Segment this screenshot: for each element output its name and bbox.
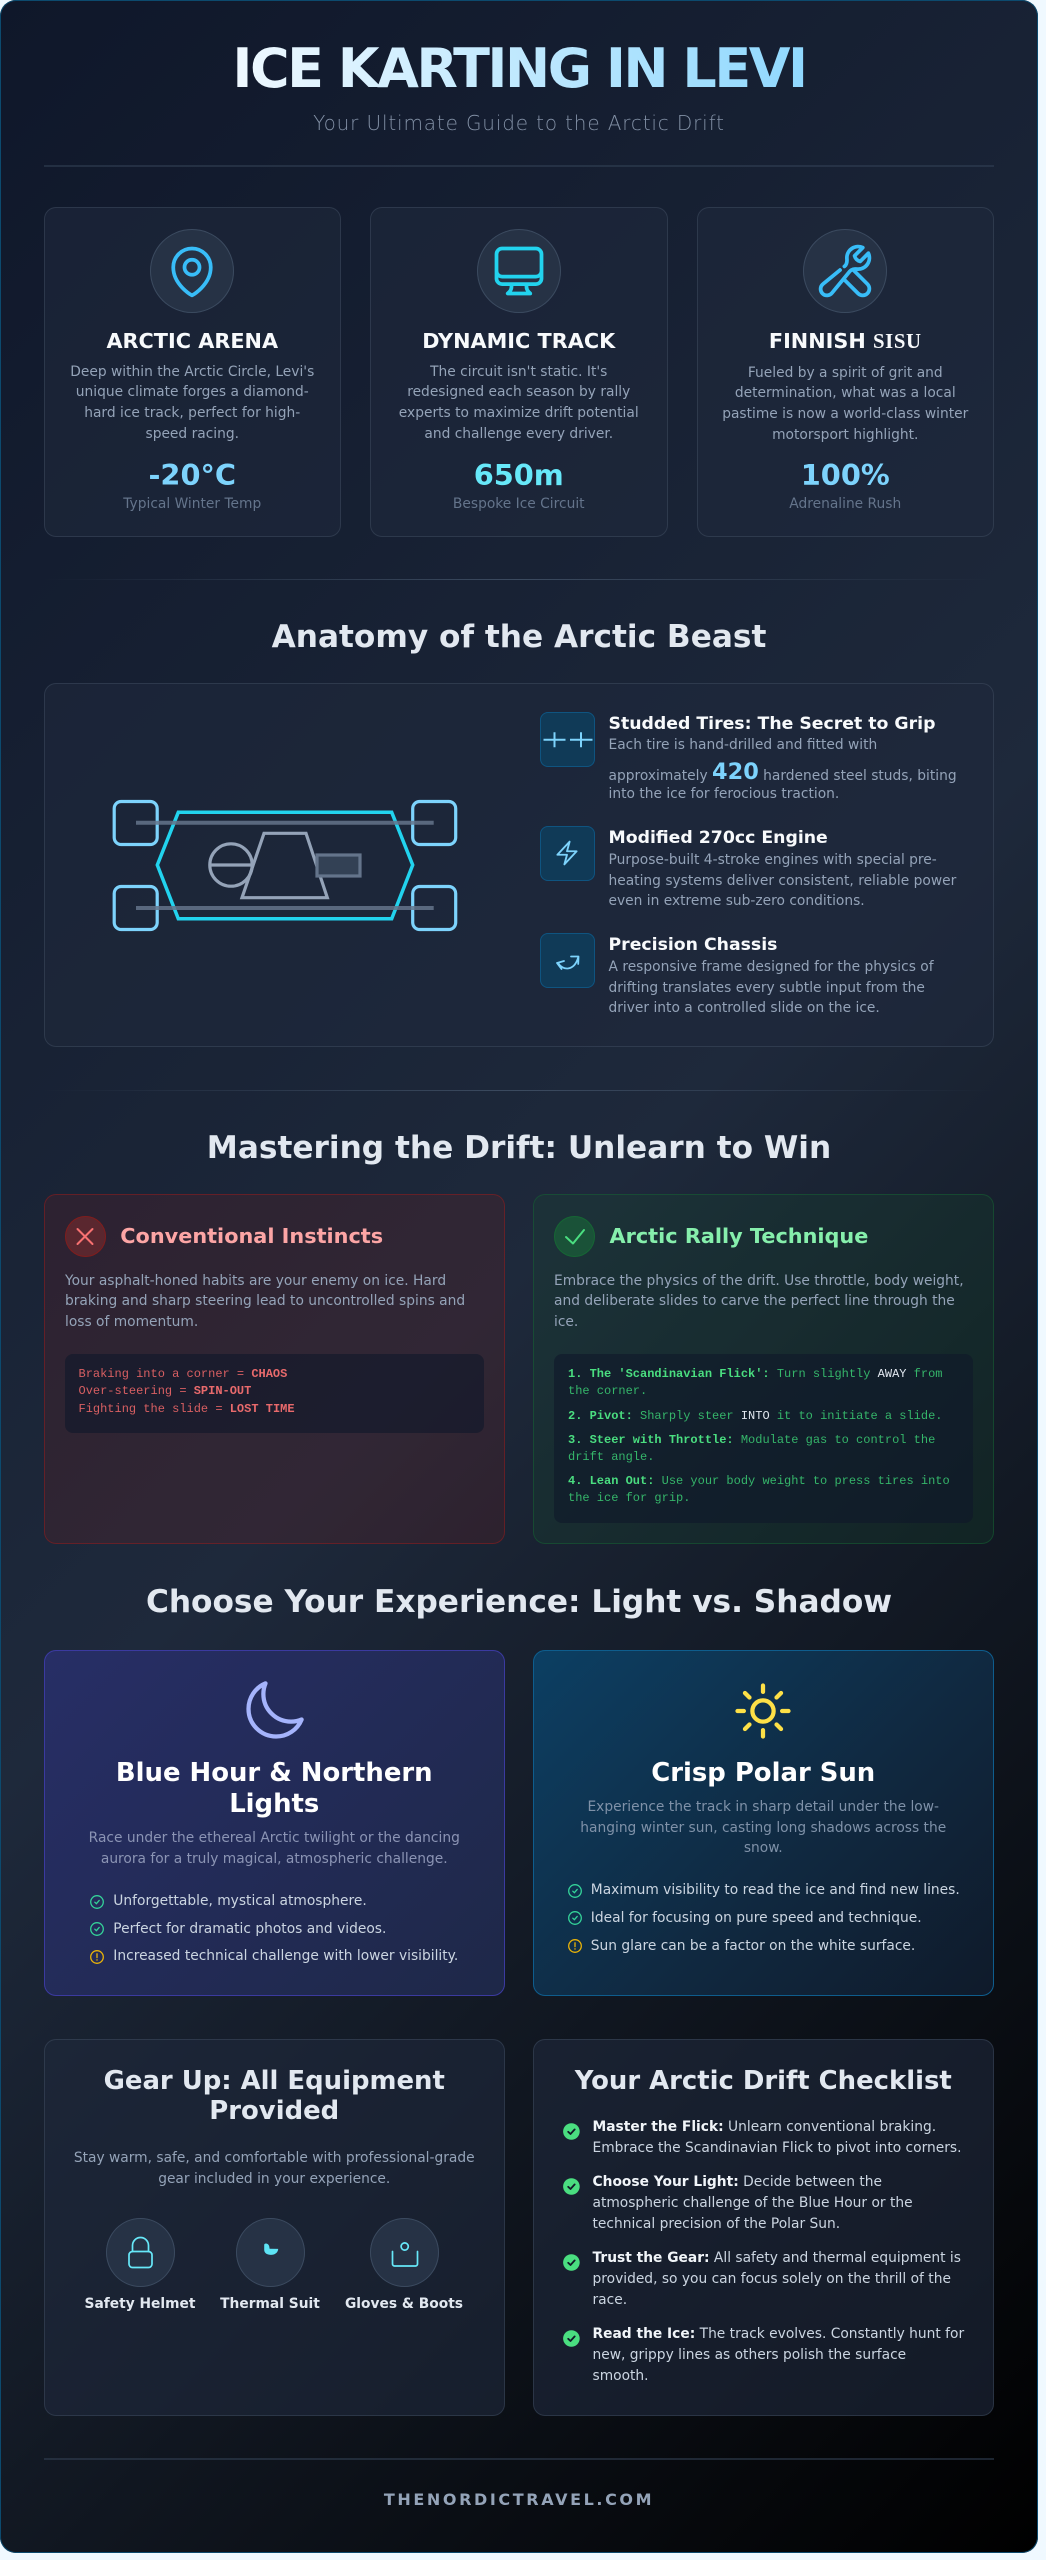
description xyxy=(70,364,314,442)
footer: THENORDICTRAVEL.COM xyxy=(384,2490,654,2509)
feature text: tires: into the ice for ferocious traction. xyxy=(608,786,839,802)
icon: check xyxy=(554,1216,595,1256)
description: pastime is now a world-class winter xyxy=(722,406,968,422)
list: Ideal for focusing on pure speed and technique. xyxy=(591,1910,922,1926)
icon: moon xyxy=(246,1681,304,1739)
checklist item: Read the Ice: The track evolves. Constantly hunt for xyxy=(592,2326,964,2342)
stat: -20°C xyxy=(148,458,236,492)
feature text: chassis xyxy=(608,959,934,1016)
text: loss of momentum. xyxy=(65,1314,198,1330)
heading: Conventional Instincts xyxy=(120,1224,383,1248)
checklist item: Trust the Gear: All safety and thermal equipment is xyxy=(592,2250,961,2266)
panel: anatomy xyxy=(44,683,994,1047)
heading: Lights xyxy=(229,1789,319,1819)
code box: 1. The 'Scandinavian Flick': Turn slightly AWAY from xyxy=(568,1367,942,1381)
text: Embrace the physics of the drift. Use throttle, body weight, xyxy=(554,1272,964,1288)
panel: finnish sisu xyxy=(696,207,994,537)
panel: rally technique xyxy=(532,1194,994,1544)
list: Maximum visibility to read the ice and find new lines. xyxy=(591,1882,960,1898)
text: Race under the ethereal Arctic twilight or the dancing xyxy=(89,1830,460,1846)
panel: blue hour xyxy=(44,1650,505,1996)
label: Gloves & Boots xyxy=(345,2296,463,2312)
text: Stay warm, safe, and comfortable with professional-grade xyxy=(74,2150,475,2166)
feature text: chassis: driver into a controlled slide on the ice. xyxy=(608,1000,880,1016)
stat: 100% xyxy=(801,458,890,492)
list: Sun glare can be a factor on the white surface. xyxy=(591,1938,915,1954)
heading xyxy=(104,2066,445,2126)
code box xyxy=(554,1354,972,1522)
code box: Braking into a corner = CHAOS xyxy=(78,1367,287,1381)
text: hanging winter sun, casting long shadows across the xyxy=(580,1820,946,1836)
checklist item: technical precision of the Polar Sun. xyxy=(592,2216,840,2232)
description xyxy=(722,364,968,443)
code box: 3. Steer with Throttle: Modulate gas to control the xyxy=(568,1432,935,1446)
text: gear included in your experience. xyxy=(158,2171,390,2187)
feature text: chassis: drifting translates every subtle input from the xyxy=(608,980,925,996)
icon: lock xyxy=(106,2218,174,2286)
code box: 4. Lean Out: Use your body weight to press tires into xyxy=(568,1474,950,1488)
stat label: Bespoke Ice Circuit xyxy=(453,496,585,512)
icon: map pin xyxy=(150,229,234,313)
panel: dynamic track xyxy=(370,207,668,537)
description: hard ice track, perfect for high- xyxy=(84,405,300,421)
text: snow. xyxy=(744,1840,783,1856)
checklist item: provided, so you can focus solely on the thrill of the xyxy=(592,2271,951,2287)
icon: gloves xyxy=(370,2218,438,2286)
stat label: Typical Winter Temp xyxy=(123,496,261,512)
text: Your asphalt-honed habits are your enemy on ice. Hard xyxy=(65,1272,446,1288)
panel: checklist xyxy=(532,2039,994,2416)
checklist item: Choose Your Light: Decide between the xyxy=(592,2174,882,2190)
gear: suit xyxy=(220,2218,320,2312)
stat: 650m xyxy=(474,458,564,492)
checklist item: Master the Flick: Unlearn conventional braking. xyxy=(592,2119,936,2135)
code box: drift angle. xyxy=(568,1450,654,1464)
heading: Your Arctic Drift Checklist xyxy=(575,2066,952,2096)
description: Deep within the Arctic Circle, Levi's xyxy=(70,364,314,380)
code box: 2. Pivot: Sharply steer INTO it to initiate a slide. xyxy=(568,1408,942,1422)
text: aurora for a truly magical, atmospheric challenge. xyxy=(101,1851,448,1867)
checklist item: smooth. xyxy=(592,2368,649,2384)
description: unique climate forges a diamond- xyxy=(76,384,309,400)
heading: anatomy: Anatomy of the Arctic Beast xyxy=(272,619,766,655)
description: and challenge every driver. xyxy=(424,426,613,442)
icon: cross xyxy=(65,1216,106,1256)
feature text: tires: approximately 420 hardened steel studs, biting xyxy=(608,758,957,784)
feature text: engine: heating systems deliver consistent, reliable power xyxy=(608,872,956,888)
icon: suit xyxy=(236,2218,304,2286)
text: and deliberate slides to carve the perfect line through the xyxy=(554,1293,955,1309)
code box: the corner. xyxy=(568,1384,647,1398)
heading: Crisp Polar Sun xyxy=(651,1758,875,1788)
text: ice. xyxy=(554,1314,578,1330)
text xyxy=(554,1272,964,1330)
feature text: engine: even in extreme sub-zero conditions. xyxy=(608,893,865,909)
subtitle: Your Ultimate Guide to the Arctic Drift xyxy=(313,110,725,134)
checklist item xyxy=(563,2174,913,2232)
checklist item: Embrace the Scandinavian Flick to pivot into corners. xyxy=(592,2140,962,2156)
stat label: Adrenaline Rush xyxy=(789,496,901,512)
checklist item: new, grippy lines as others polish the surface xyxy=(592,2347,906,2363)
panel: arctic arena xyxy=(44,207,341,537)
heading: FINNISH SISU xyxy=(769,329,922,353)
feature: chassis: Precision Chassis xyxy=(608,935,777,955)
panel: polar sun xyxy=(532,1650,994,1996)
feature text: chassis: A responsive frame designed for the physics of xyxy=(608,959,934,975)
panel: gear xyxy=(44,2039,505,2416)
list xyxy=(568,1882,960,1954)
description: motorsport highlight. xyxy=(772,427,918,443)
checklist item: race. xyxy=(592,2292,627,2308)
title: ICE KARTING IN LEVI xyxy=(232,37,806,100)
checklist item xyxy=(563,2250,961,2308)
icon: bolt xyxy=(540,826,594,880)
description: experts to maximize drift potential xyxy=(399,405,639,421)
feature: engine: Modified 270cc Engine xyxy=(608,828,828,848)
text xyxy=(74,2150,475,2187)
heading: mastering: Mastering the Drift: Unlearn to Win xyxy=(207,1130,831,1166)
gear: gloves xyxy=(345,2218,463,2312)
description: The circuit isn't static. It's xyxy=(430,364,607,380)
text xyxy=(65,1272,465,1330)
checklist item xyxy=(563,2119,962,2156)
heading: ARCTIC ARENA xyxy=(106,329,278,353)
description xyxy=(399,364,639,442)
checklist item: atmospheric challenge of the Blue Hour or the xyxy=(592,2195,913,2211)
list: Increased technical challenge with lower visibility. xyxy=(113,1948,458,1964)
icon: wrench xyxy=(803,229,887,313)
checklist item xyxy=(563,2326,964,2384)
diagram: kart top view xyxy=(112,800,458,932)
code box: the ice for grip. xyxy=(568,1491,690,1505)
list xyxy=(90,1893,458,1964)
description: speed racing. xyxy=(146,426,239,442)
text: braking and sharp steering lead to uncontrolled spins and xyxy=(65,1293,465,1309)
heading: Gear Up: All Equipment xyxy=(104,2066,445,2096)
heading: DYNAMIC TRACK xyxy=(422,329,615,353)
heading: Provided xyxy=(209,2096,339,2126)
panel: conventional instincts xyxy=(44,1194,505,1544)
feature: studded tires: Studded Tires: The Secret to Grip xyxy=(608,714,935,734)
heading: Blue Hour & Northern xyxy=(116,1758,433,1788)
label: Safety Helmet xyxy=(85,2296,195,2312)
gear: helmet xyxy=(85,2218,196,2312)
text: Experience the track in sharp detail under the low- xyxy=(587,1799,939,1815)
text xyxy=(89,1830,460,1867)
feature text: tires: Each tire is hand-drilled and fitted with xyxy=(608,737,877,753)
icon: monitor xyxy=(477,229,561,313)
feature text: engine xyxy=(608,852,956,909)
text xyxy=(580,1799,946,1856)
list: Unforgettable, mystical atmosphere. xyxy=(113,1893,367,1909)
list: Perfect for dramatic photos and videos. xyxy=(113,1921,386,1937)
code box xyxy=(65,1354,484,1432)
heading: Arctic Rally Technique xyxy=(610,1224,868,1248)
code box: Fighting the slide = LOST TIME xyxy=(78,1402,295,1416)
icon: sun xyxy=(735,1683,791,1739)
description: Fueled by a spirit of grit and xyxy=(748,364,943,380)
heading xyxy=(116,1758,433,1819)
feature text: engine: Purpose-built 4-stroke engines with special pre- xyxy=(608,852,937,868)
heading: experience: Choose Your Experience: Light vs. Shadow xyxy=(146,1584,892,1620)
description: redesigned each season by rally xyxy=(407,384,630,400)
description: determination, what was a local xyxy=(735,385,956,401)
icon: arrow xyxy=(540,933,594,988)
icon: studs xyxy=(540,712,594,766)
feature text: tires xyxy=(608,737,957,802)
code box: Over-steering = SPIN-OUT xyxy=(78,1384,251,1398)
label: Thermal Suit xyxy=(220,2296,320,2312)
